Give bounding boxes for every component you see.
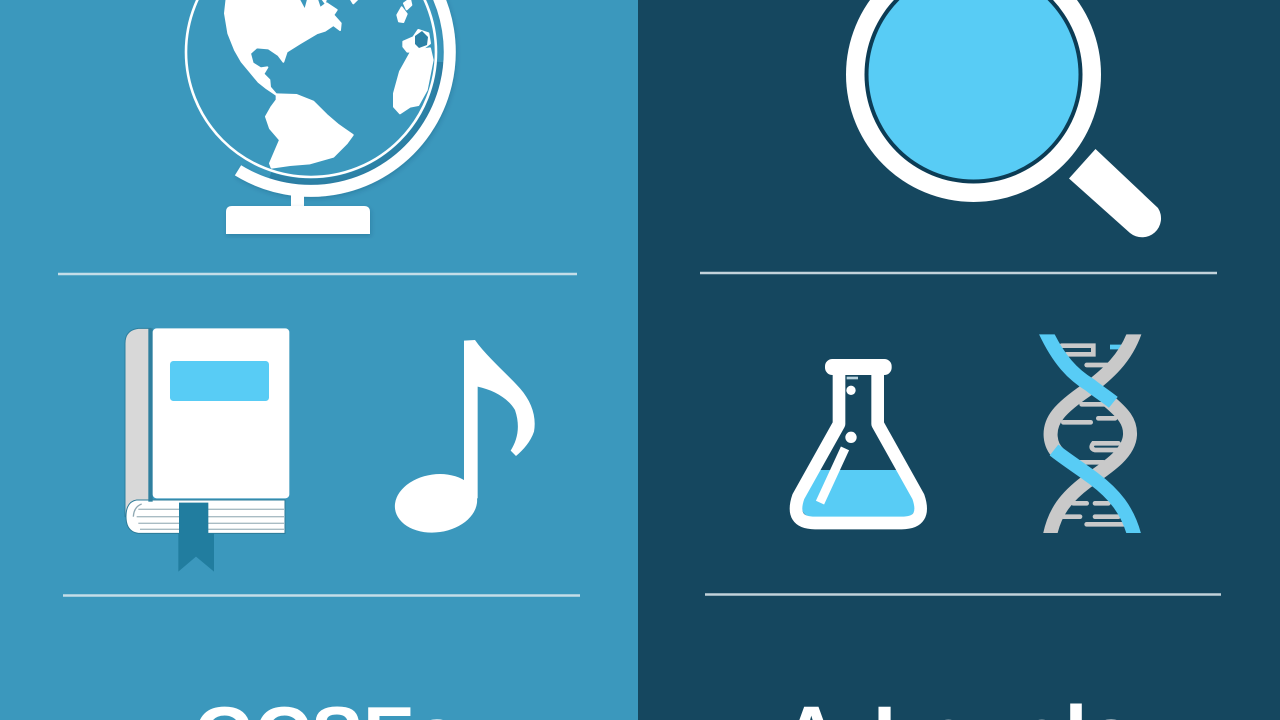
icon: music note (391, 340, 535, 538)
panel: GCSEs (0, 0, 638, 720)
panel: A Levels (790, 0, 1161, 533)
icon: DNA helix (1044, 328, 1136, 538)
icon: globe (186, 0, 450, 234)
icon: magnifying glass (846, 0, 1161, 237)
divider lines (58, 273, 1221, 596)
icon: book (125, 328, 289, 572)
icon: flask (796, 359, 921, 523)
